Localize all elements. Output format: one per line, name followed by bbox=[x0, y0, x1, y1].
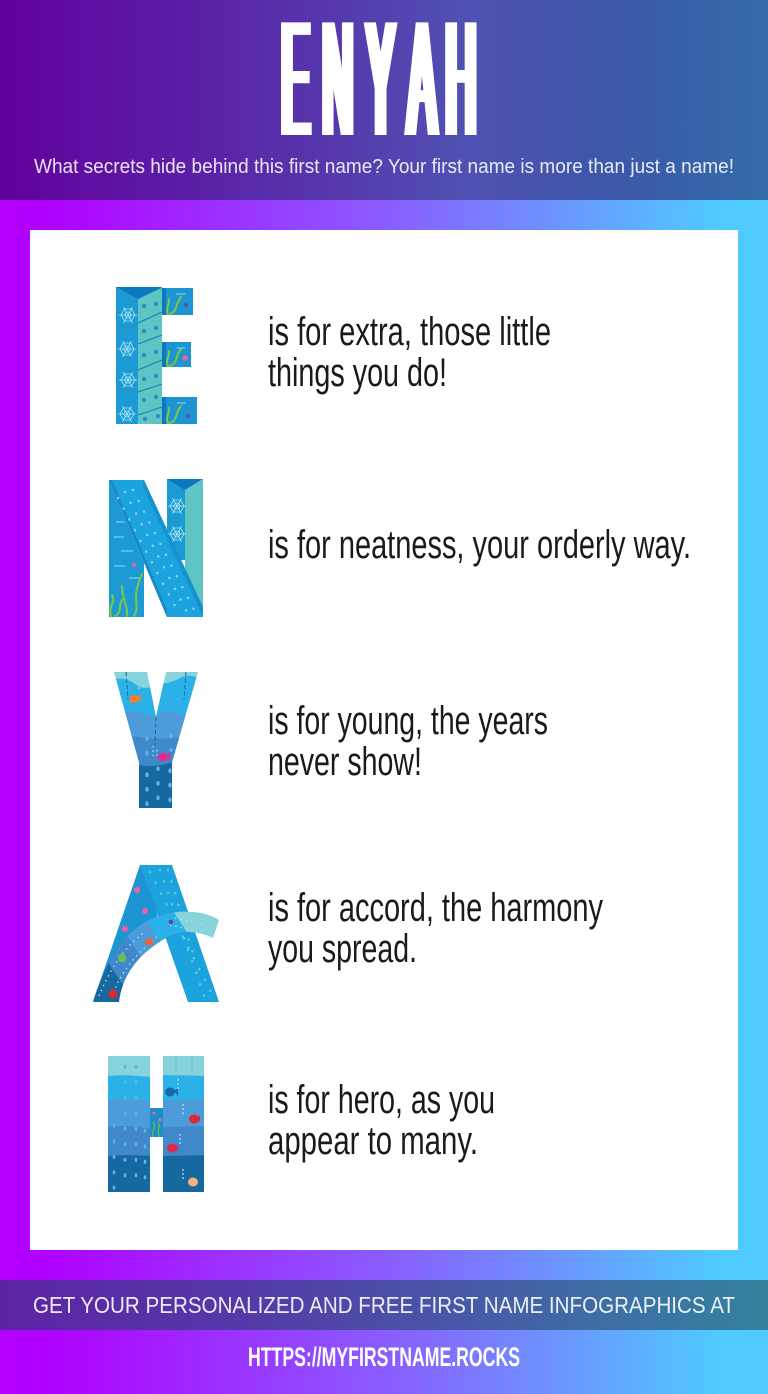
text: Y lines: is for young, the years bbox=[268, 699, 548, 743]
text: Y lines: never show! bbox=[268, 740, 422, 784]
subtitle: What secrets hide behind this first name? Your first name is more than just a name! bbox=[34, 156, 734, 178]
icon: ocean letter H bbox=[105, 1054, 207, 1195]
letter row: H bbox=[105, 1054, 495, 1195]
icon: ocean letter Y bbox=[114, 672, 198, 808]
website url: HTTPS://MYFIRSTNAME.ROCKS bbox=[248, 1342, 520, 1372]
letter row: E bbox=[116, 287, 551, 424]
icon: ocean letter E bbox=[116, 287, 197, 424]
text: H lines bbox=[268, 1078, 495, 1163]
text: A lines bbox=[268, 886, 603, 971]
footer call-to-action band bbox=[0, 1280, 768, 1330]
text: A lines: is for accord, the harmony bbox=[268, 886, 603, 930]
main white panel bbox=[30, 230, 738, 1250]
letter row: A bbox=[90, 865, 603, 1005]
text: Y lines bbox=[268, 699, 548, 784]
letter row: Y bbox=[110, 670, 548, 810]
icon: ocean letter N bbox=[109, 479, 203, 617]
text: E line: is for extra, those little bbox=[268, 310, 551, 354]
text: A lines: you spread. bbox=[268, 927, 417, 971]
icon: ocean letter A bbox=[90, 865, 225, 1005]
text: H lines: is for hero, as you bbox=[268, 1078, 495, 1122]
text: E line bbox=[268, 310, 551, 395]
header band bbox=[0, 0, 768, 200]
letter row: N bbox=[109, 479, 691, 617]
text: E line: things you do! bbox=[268, 351, 447, 395]
text: H lines: appear to many. bbox=[268, 1119, 478, 1163]
